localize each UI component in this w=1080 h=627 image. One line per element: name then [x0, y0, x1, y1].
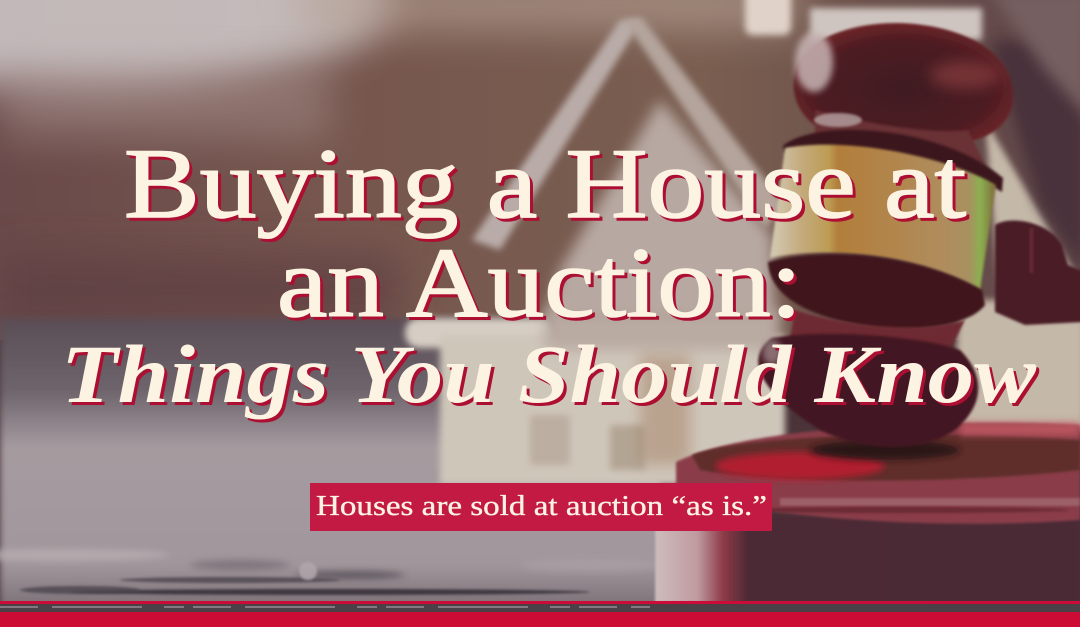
gavel gold band: [770, 145, 996, 290]
title line 2: an Auction:: [277, 227, 802, 338]
title line 3 italic: Things You Should Know: [61, 328, 1037, 420]
title: [61, 128, 1040, 423]
left rafter: [472, 20, 642, 250]
house wall: [440, 335, 785, 485]
gavel handle: [995, 221, 1080, 325]
icon: gavel sound block: [655, 422, 1080, 603]
background photo: back house panel: [950, 0, 1080, 430]
caption banner: [310, 483, 772, 531]
background photo: blurred wall: [0, 0, 1080, 340]
porch ledge: [405, 318, 555, 348]
house gable: [545, 100, 775, 320]
gavel top cap: [794, 23, 1013, 142]
caption banner: Houses are sold at auction “as is.”: [316, 491, 767, 522]
gavel lower collar: [768, 254, 985, 329]
icon: gavel: [758, 23, 1080, 447]
gavel neck: [815, 110, 985, 165]
background photo: wooden table: [0, 318, 660, 608]
gavel upper collar: [783, 130, 1003, 192]
title line 3 italic: Things You Should Know: [64, 331, 1040, 423]
title line 1: Buying a House at: [127, 131, 969, 242]
footer bars: [0, 601, 1080, 627]
gavel bottom cap: [758, 334, 978, 447]
background photo: model house: [405, 18, 785, 485]
title line 1: Buying a House at: [124, 128, 966, 239]
title line 2: an Auction:: [280, 230, 805, 341]
gavel neck lower: [790, 310, 965, 350]
right rafter: [624, 18, 785, 228]
